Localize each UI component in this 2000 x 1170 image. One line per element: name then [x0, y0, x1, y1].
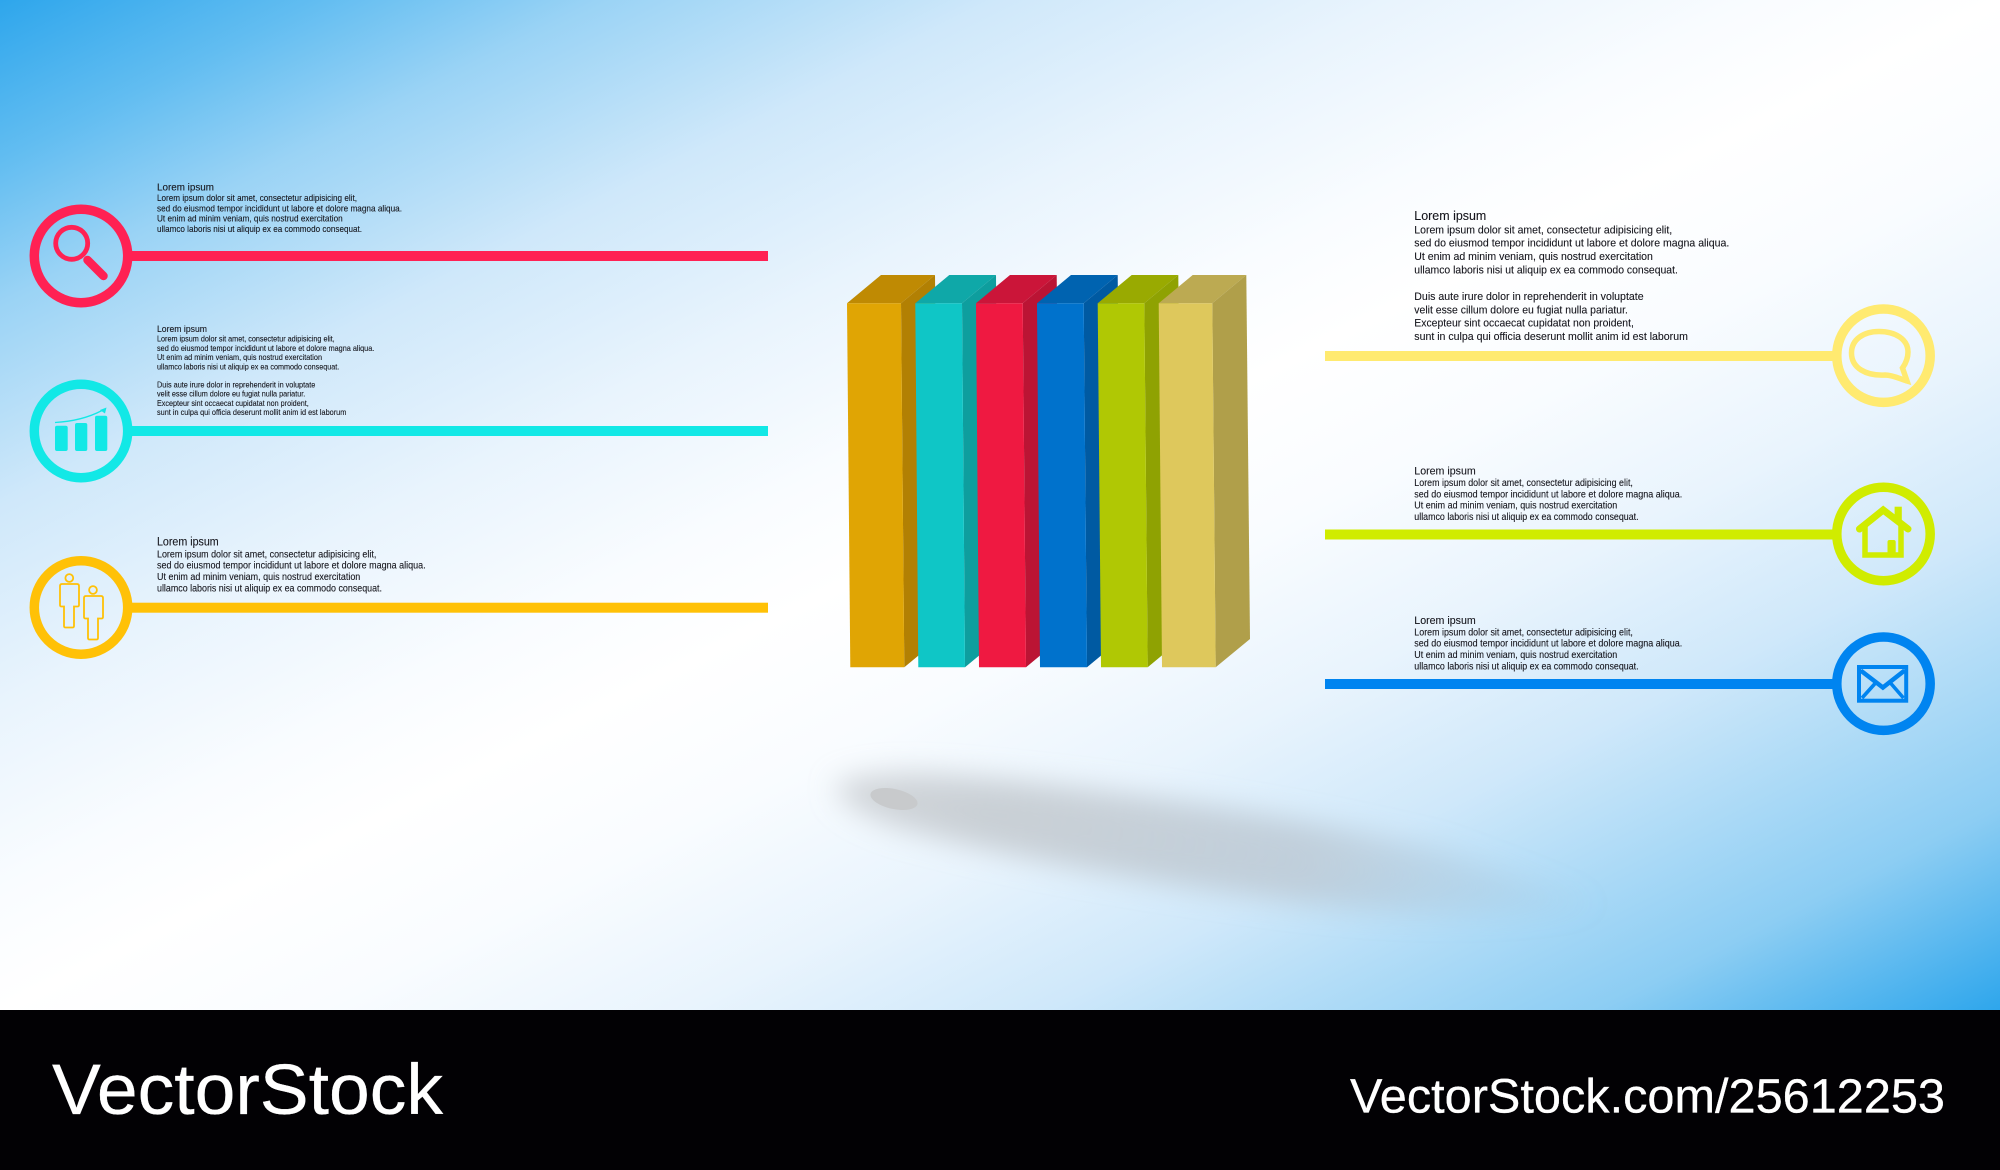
- text block: top left: Ut enim ad minim veniam, quis nostrud exercitation: [157, 214, 343, 224]
- ring and icon: bar chart: [34, 384, 128, 478]
- bar 1: amber: [847, 275, 938, 667]
- text block: top right: Lorem ipsum: [1414, 208, 1486, 223]
- text block: bottom left: Lorem ipsum dolor sit amet, consectetur adipisicing elit,: [157, 549, 376, 560]
- footer logo text: VectorStock: [52, 1051, 444, 1130]
- text block: top left: ullamco laboris nisi ut aliquip ex ea commodo consequat.: [157, 224, 362, 234]
- text block: bottom left: sed do eiusmod tempor incididunt ut labore et dolore magna aliqua.: [157, 561, 426, 572]
- connector line: amber: [130, 603, 768, 613]
- ring and icon: house: [1837, 487, 1930, 581]
- text block: top right: sunt in culpa qui officia deserunt mollit anim id est laborum: [1414, 331, 1688, 343]
- text block: bottom left: Lorem ipsum: [157, 537, 219, 549]
- text block: middle right: Lorem ipsum dolor sit amet, consectetur adipisicing elit,: [1414, 478, 1633, 489]
- text block: top left: sed do eiusmod tempor incididunt ut labore et dolore magna aliqua.: [157, 203, 402, 213]
- text block: top right: velit esse cillum dolore eu fugiat nulla pariatur.: [1414, 304, 1628, 316]
- text block: middle right: Ut enim ad minim veniam, quis nostrud exercitation: [1414, 501, 1617, 512]
- text block: bottom left: [157, 537, 426, 594]
- text block: top right: [1414, 208, 1729, 343]
- text block: middle left: [157, 324, 374, 417]
- text block: bottom right: ullamco laboris nisi ut aliquip ex ea commodo consequat.: [1414, 661, 1639, 672]
- text block: bottom right: Lorem ipsum dolor sit amet, consectetur adipisicing elit,: [1414, 627, 1633, 638]
- text block: middle left: velit esse cillum dolore eu fugiat nulla pariatur.: [157, 389, 305, 399]
- connector line: blue: [1325, 679, 1837, 689]
- text block: middle right: sed do eiusmod tempor incididunt ut labore et dolore magna aliqua.: [1414, 489, 1682, 500]
- text block: middle left: Lorem ipsum dolor sit amet, consectetur adipisicing elit,: [157, 334, 335, 344]
- connector line: red: [130, 251, 768, 261]
- text block: top left: Lorem ipsum: [157, 182, 214, 194]
- text block: top left: Lorem ipsum dolor sit amet, consectetur adipisicing elit,: [157, 193, 357, 203]
- text block: middle left: Lorem ipsum: [157, 324, 207, 335]
- bar 3: red: [976, 275, 1060, 667]
- text block: middle left: ullamco laboris nisi ut aliquip ex ea commodo consequat.: [157, 361, 339, 371]
- ring and icon: magnifier: [34, 209, 128, 303]
- text block: top right: Lorem ipsum dolor sit amet, consectetur adipisicing elit,: [1414, 224, 1672, 236]
- text block: middle left: Ut enim ad minim veniam, quis nostrud exercitation: [157, 352, 322, 362]
- connector line: pale yellow: [1325, 351, 1837, 361]
- text block: bottom left: ullamco laboris nisi ut aliquip ex ea commodo consequat.: [157, 583, 382, 594]
- text block: top left: [157, 182, 402, 234]
- text block: top right: Duis aute irure dolor in reprehenderit in voluptate: [1414, 291, 1644, 303]
- text block: middle left: sunt in culpa qui officia deserunt mollit anim id est laborum: [157, 407, 346, 417]
- text block: middle left: Excepteur sint occaecat cupidatat non proident,: [157, 398, 309, 408]
- 3D block made of six vertical bars: [847, 275, 1250, 667]
- bar 5: lime: [1098, 275, 1182, 667]
- text block: middle right: ullamco laboris nisi ut aliquip ex ea commodo consequat.: [1414, 512, 1639, 523]
- text block: bottom right: [1414, 615, 1682, 672]
- text block: bottom left: Ut enim ad minim veniam, quis nostrud exercitation: [157, 572, 360, 583]
- floor shadow: [835, 773, 1600, 913]
- ring and icon: envelope: [1837, 637, 1930, 730]
- bar 2: teal: [915, 275, 999, 667]
- footer band: [0, 1010, 2000, 1170]
- text block: middle left: Duis aute irure dolor in reprehenderit in voluptate: [157, 380, 316, 390]
- text block: middle right: [1414, 466, 1682, 523]
- text block: bottom right: Ut enim ad minim veniam, quis nostrud exercitation: [1414, 650, 1617, 661]
- text block: top right: Excepteur sint occaecat cupidatat non proident,: [1414, 318, 1634, 330]
- text block: bottom right: sed do eiusmod tempor incididunt ut labore et dolore magna aliqua.: [1414, 639, 1682, 650]
- text block: top right: sed do eiusmod tempor incididunt ut labore et dolore magna aliqua.: [1414, 238, 1729, 250]
- connector line: cyan: [130, 426, 768, 436]
- text block: bottom right: Lorem ipsum: [1414, 615, 1476, 627]
- bar 4: blue: [1037, 275, 1121, 667]
- ring and icon: two people: [34, 561, 128, 654]
- text block: middle right: Lorem ipsum: [1414, 466, 1476, 478]
- text block: top right: Ut enim ad minim veniam, quis nostrud exercitation: [1414, 251, 1653, 263]
- text block: middle left: sed do eiusmod tempor incididunt ut labore et dolore magna aliqua.: [157, 343, 374, 353]
- connector line: lime: [1325, 530, 1837, 540]
- ring and icon: speech bubble: [1837, 309, 1930, 402]
- text block: top right: ullamco laboris nisi ut aliquip ex ea commodo consequat.: [1414, 264, 1678, 276]
- footer image id text: VectorStock.com/25612253: [1350, 1071, 1945, 1124]
- bar 6: sand: [1159, 275, 1250, 667]
